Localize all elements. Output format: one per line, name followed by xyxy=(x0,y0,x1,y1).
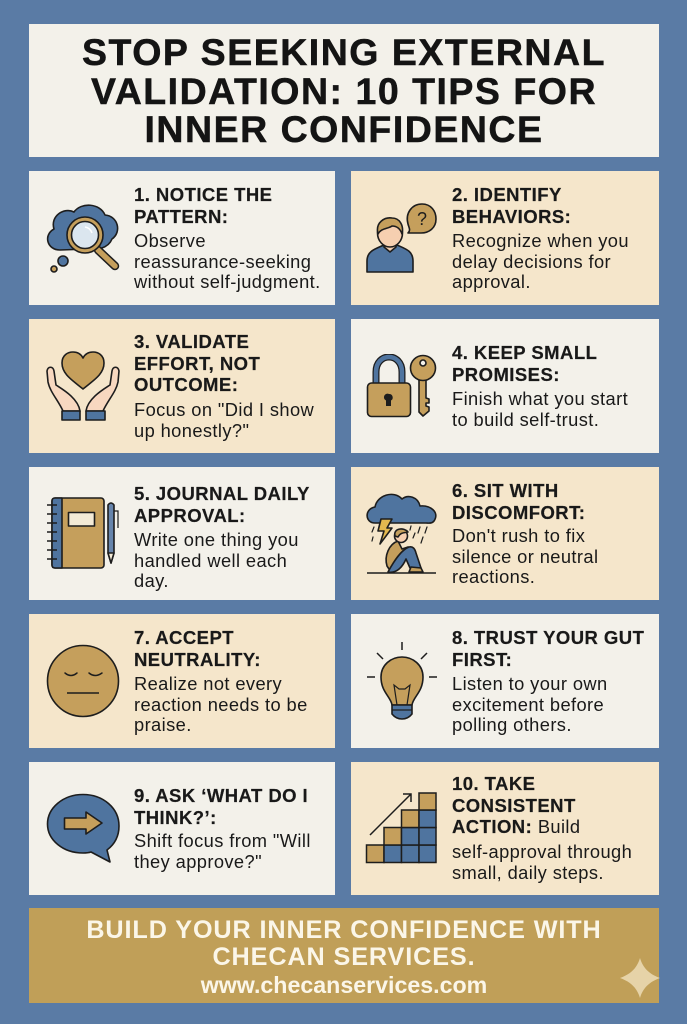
heading xyxy=(452,184,571,227)
body text: Observe xyxy=(134,230,206,251)
heading: 9. ASK ‘WHAT DO I xyxy=(134,785,308,806)
heading xyxy=(134,785,308,828)
body text xyxy=(134,673,308,735)
icon: hands holding heart xyxy=(46,351,120,421)
panel: tip 7 xyxy=(29,614,335,748)
body text: Finish what you start xyxy=(452,388,628,409)
title: VALIDATION: 10 TIPS FOR xyxy=(91,70,597,112)
body text xyxy=(452,673,608,735)
body text: to build self-trust. xyxy=(452,409,599,430)
heading: 1. NOTICE THE xyxy=(134,184,272,205)
icon: speech bubble with arrow xyxy=(46,794,120,863)
heading and lead-in: 10. TAKE xyxy=(452,773,535,794)
icon: thought cloud with magnifier xyxy=(46,204,120,273)
body text: Focus on "Did I show xyxy=(134,399,314,420)
heading xyxy=(452,480,585,523)
body text: polling others. xyxy=(452,714,572,735)
heading: OUTCOME: xyxy=(134,374,238,395)
body text: they approve?" xyxy=(134,851,262,872)
panel: tip 9 xyxy=(29,762,335,895)
body text xyxy=(134,230,321,292)
icon: person under storm cloud xyxy=(366,494,437,574)
heading: PATTERN: xyxy=(134,206,228,227)
heading: APPROVAL: xyxy=(134,505,246,526)
title xyxy=(29,24,659,157)
footer website: www.checanservices.com xyxy=(201,972,487,998)
panel: tip 2 xyxy=(351,171,659,305)
footer banner xyxy=(29,908,659,1003)
body text xyxy=(452,525,598,587)
body text: silence or neutral xyxy=(452,546,598,567)
icon: person with question bubble: ? xyxy=(417,209,427,229)
heading: BEHAVIORS: xyxy=(452,206,571,227)
body text xyxy=(452,388,628,430)
icon: padlock and key xyxy=(366,354,436,418)
body text: Don't rush to fix xyxy=(452,525,585,546)
title: INNER CONFIDENCE xyxy=(144,108,544,150)
heading xyxy=(452,342,597,385)
title: STOP SEEKING EXTERNAL xyxy=(82,31,606,73)
body text: day. xyxy=(134,570,169,591)
body text: self-approval through xyxy=(452,841,632,862)
body text xyxy=(134,529,299,591)
body text: up honestly?" xyxy=(134,420,249,441)
heading: 4. KEEP SMALL xyxy=(452,342,597,363)
icon: journal and pen xyxy=(47,497,119,569)
heading: NEUTRALITY: xyxy=(134,649,261,670)
panel: tip 6 xyxy=(351,467,659,600)
body text: reassurance-seeking xyxy=(134,251,311,272)
heading: 3. VALIDATE xyxy=(134,331,249,352)
body text: approval. xyxy=(452,271,531,292)
icon: light bulb xyxy=(367,642,437,720)
body text: Realize not every xyxy=(134,673,282,694)
body text: handled well each xyxy=(134,550,287,571)
body text xyxy=(452,841,632,883)
heading and lead-in: CONSISTENT xyxy=(452,795,576,816)
heading: THINK?’: xyxy=(134,807,217,828)
heading xyxy=(134,483,310,526)
body text: praise. xyxy=(134,714,192,735)
body text xyxy=(452,230,629,292)
panel: tip 10 xyxy=(351,762,659,895)
heading xyxy=(134,184,272,227)
heading: 6. SIT WITH xyxy=(452,480,559,501)
body text: reactions. xyxy=(452,566,535,587)
heading: PROMISES: xyxy=(452,364,560,385)
body text: Recognize when you xyxy=(452,230,629,251)
body text: without self-judgment. xyxy=(134,271,321,292)
heading xyxy=(452,627,644,670)
body text xyxy=(134,399,314,441)
body text: reaction needs to be xyxy=(134,694,308,715)
icon: person with question bubble xyxy=(366,203,437,273)
body text: small, daily steps. xyxy=(452,862,604,883)
heading: 8. TRUST YOUR GUT xyxy=(452,627,644,648)
heading: 7. ACCEPT xyxy=(134,627,234,648)
heading and lead-in: ACTION: Build xyxy=(452,816,580,837)
body text: Write one thing you xyxy=(134,529,299,550)
heading: EFFORT, NOT xyxy=(134,353,260,374)
footer call to action: CHECAN SERVICES. xyxy=(212,943,476,971)
icon: sparkle star xyxy=(620,958,660,998)
panel: tip 5 xyxy=(29,467,335,600)
body text: Listen to your own xyxy=(452,673,608,694)
icon: neutral face xyxy=(46,644,120,718)
body text xyxy=(134,830,311,872)
body text: Shift focus from "Will xyxy=(134,830,311,851)
heading and lead-in xyxy=(452,773,580,837)
panel: tip 4 xyxy=(351,319,659,453)
heading xyxy=(134,627,261,670)
footer call to action xyxy=(86,916,602,971)
heading: 5. JOURNAL DAILY xyxy=(134,483,310,504)
body text: excitement before xyxy=(452,694,604,715)
heading xyxy=(134,331,260,395)
icon: rising stair blocks with arrow xyxy=(366,792,437,864)
panel: tip 3 xyxy=(29,319,335,453)
heading: 2. IDENTIFY xyxy=(452,184,562,205)
footer call to action: BUILD YOUR INNER CONFIDENCE WITH xyxy=(86,916,602,944)
panel: tip 1 xyxy=(29,171,335,305)
panel: tip 8 xyxy=(351,614,659,748)
heading: DISCOMFORT: xyxy=(452,502,585,523)
body text: delay decisions for xyxy=(452,251,611,272)
heading: FIRST: xyxy=(452,649,512,670)
